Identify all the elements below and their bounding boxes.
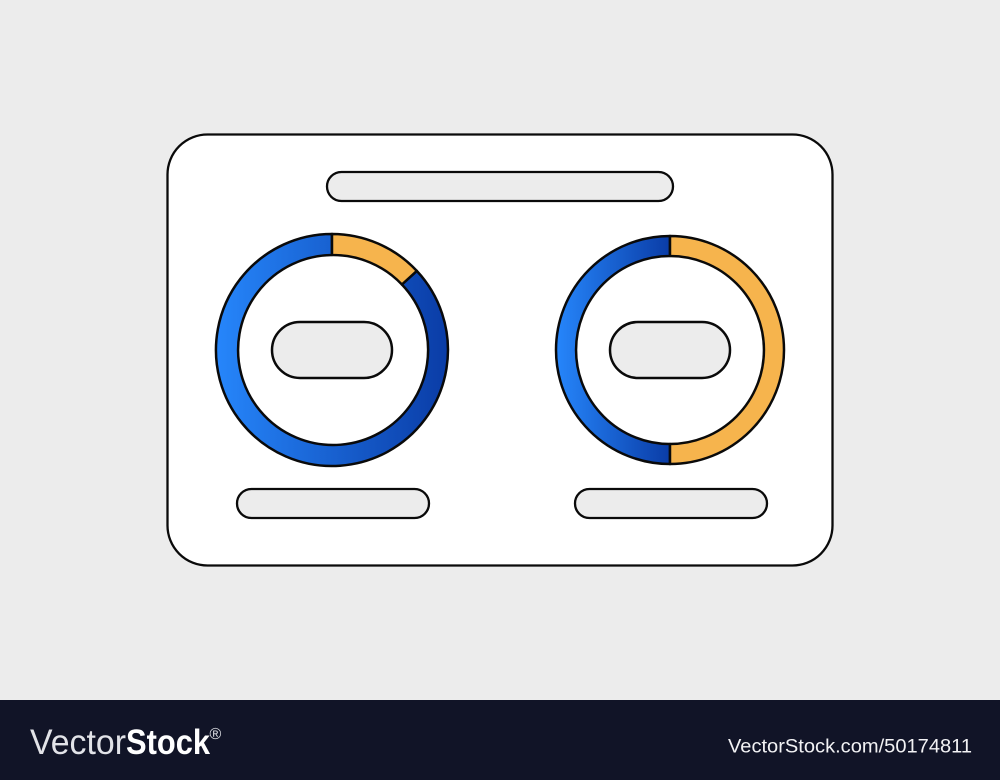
right donut: orange segment: [670, 236, 784, 464]
title placeholder pill: [327, 172, 673, 201]
right donut: centre value pill: [610, 322, 730, 378]
footer logo: [30, 723, 222, 762]
right caption pill: [575, 489, 767, 518]
left donut chart: [216, 234, 448, 466]
right donut chart: [556, 236, 784, 464]
footer bar: [0, 700, 1000, 780]
right donut: blue segment: [556, 236, 670, 464]
footer logo: Stock: [126, 723, 210, 762]
left donut: orange segment: [332, 234, 417, 284]
left caption pill: [237, 489, 429, 518]
panel: white card: [168, 134, 832, 566]
footer image id: VectorStock.com/50174811: [728, 736, 972, 758]
left donut: centre value pill: [272, 322, 392, 378]
footer logo: Vector: [30, 723, 126, 762]
left donut: blue segment: [216, 234, 448, 466]
footer logo: ®: [210, 726, 222, 743]
